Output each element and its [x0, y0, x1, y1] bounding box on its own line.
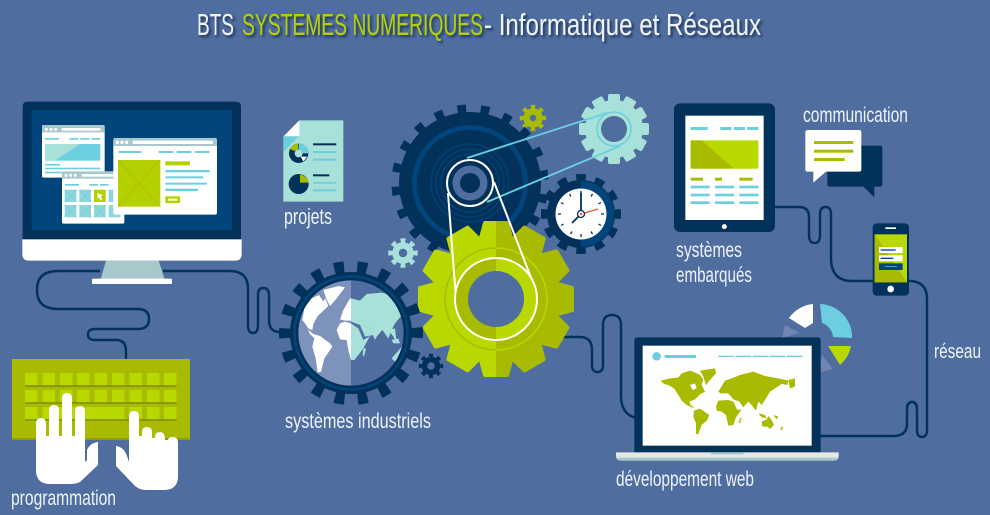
window: product detail: [113, 138, 217, 215]
small gear light: [390, 240, 416, 266]
label: développement web: développement web: [616, 468, 754, 491]
label: systèmes embarqués: [676, 239, 752, 287]
world map: [661, 368, 795, 434]
small gear lime: [522, 107, 544, 129]
keyboard: [12, 359, 190, 440]
cables: [37, 207, 927, 437]
globe: [297, 280, 406, 387]
label: systèmes industriels: systèmes industriels: [285, 410, 431, 433]
hub: [452, 166, 488, 200]
monitor screen: [32, 110, 232, 230]
monitor base: [92, 279, 172, 284]
label: systèmes embarqués: embarqués: [676, 264, 752, 287]
title: SYSTEMES NUMERIQUES: [242, 7, 483, 42]
keys: [25, 373, 176, 420]
title: BTS: [197, 7, 234, 42]
monitor stand: [101, 261, 165, 279]
lime gear: [420, 223, 572, 375]
white belt: [447, 160, 537, 340]
clock hands: [572, 193, 581, 223]
clock face: [556, 188, 606, 240]
title: - Informatique et Réseaux: [484, 7, 761, 42]
title: [197, 7, 761, 42]
window: product grid: [62, 171, 124, 224]
light gear: [579, 94, 649, 164]
globe gear: [285, 267, 417, 399]
cyan belt: [467, 113, 620, 202]
label: systèmes embarqués: systèmes: [676, 239, 742, 262]
tablet: [674, 103, 775, 232]
icon: chat bubbles: [805, 130, 882, 197]
monitor: [22, 102, 242, 284]
laptop: [616, 337, 839, 461]
label: projets: projets: [284, 204, 332, 229]
right hand: [116, 411, 178, 490]
icon: hands: [36, 393, 178, 490]
donut chart: [782, 304, 852, 373]
left hand: [36, 393, 98, 484]
clock gear: [545, 178, 617, 250]
label: programmation: programmation: [11, 487, 116, 510]
window: banner page: [42, 125, 105, 178]
label: communication: communication: [803, 104, 908, 127]
monitor chin: [22, 239, 242, 261]
monitor frame: [23, 102, 241, 239]
small gear dark: [420, 356, 442, 376]
icon: document projets: [283, 120, 343, 202]
large dark gear: [389, 102, 551, 264]
smartphone: [873, 223, 909, 296]
